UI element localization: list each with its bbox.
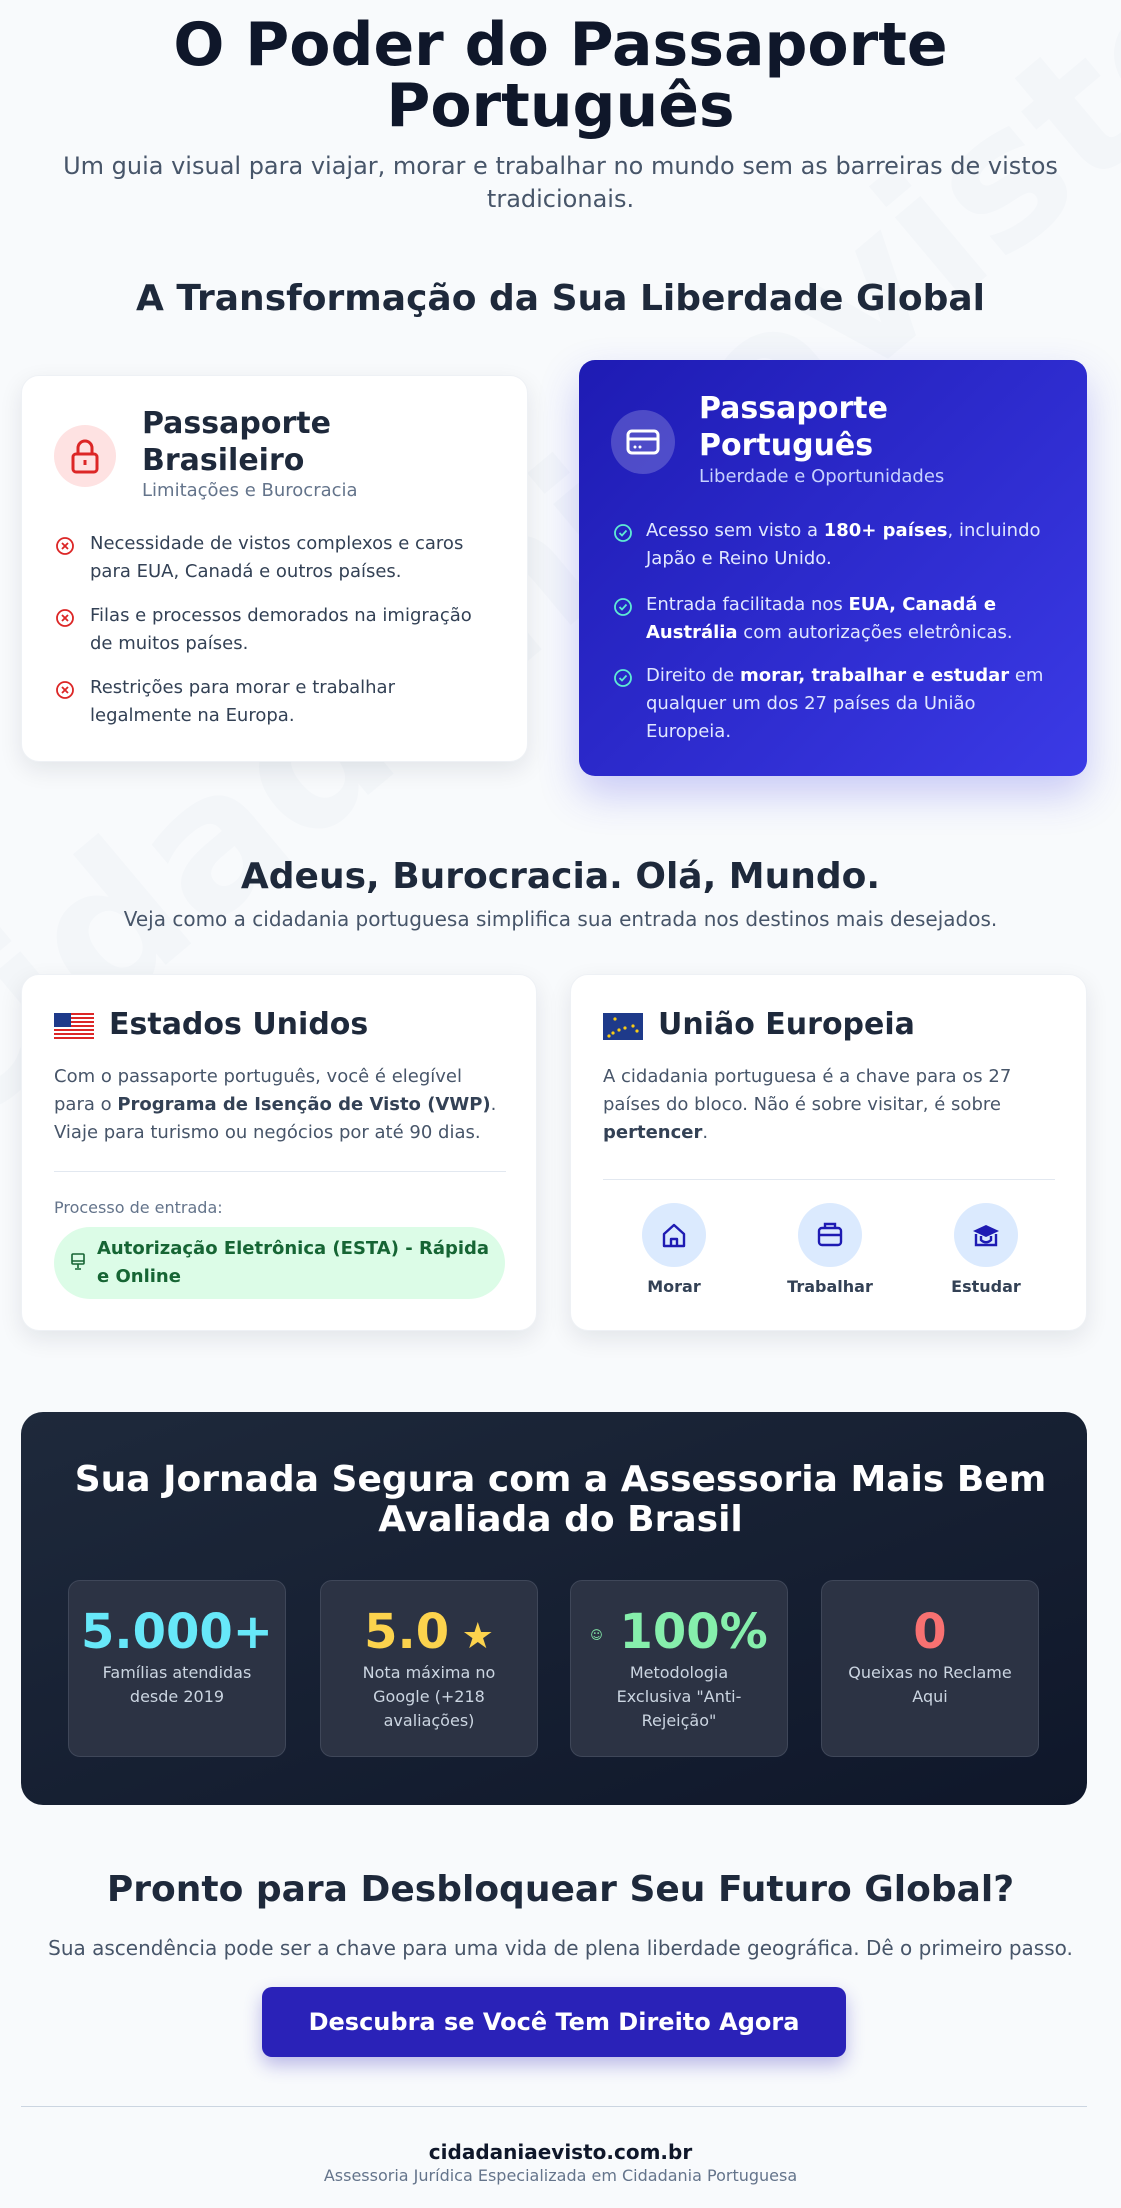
badge: esta: Autorização Eletrônica (ESTA) - Rápida e Online [97,1238,489,1287]
stat: metodologia [570,1580,788,1757]
card title: Passaporte [699,391,888,426]
list: limitações: Necessidade de vistos complexos e caros para EUA, Canadá e outros países. [90,533,463,582]
icons: morar trabalhar estudar: Estudar [951,1277,1021,1296]
card title: Brasileiro [142,443,304,478]
badge: esta [54,1227,505,1299]
text block: Viaje para turismo ou negócios por até 90 dias. [54,1122,481,1143]
stat: nota: 5.0 ★ [364,1604,494,1660]
icons: morar trabalhar estudar: Trabalhar [787,1277,873,1296]
button [262,1987,846,2057]
text block: para o Programa de Isenção de Visto (VWP). [54,1094,496,1115]
card subtitle: Liberdade e Oportunidades [699,466,944,487]
panel: união europeia [570,974,1087,1331]
stat: familias: Famílias atendidas desde 2019 [103,1663,251,1706]
footer: Assessoria Jurídica Especializada em Cidadania Portuguesa [324,2166,797,2185]
list: vantagens [614,520,1043,742]
icon: us flag [54,1013,94,1039]
text block: A cidadania portuguesa é a chave para os 27 países do bloco. Não é sobre visitar, é sobre pertencer. [603,1066,1011,1143]
icon: card [611,410,675,474]
heading: jornada segura: Sua Jornada Segura com a Assessoria Mais Bem [75,1459,1046,1500]
stat: queixas: Queixas no Reclame Aqui [848,1663,1012,1706]
subtitle: Um guia visual para viajar, morar e trabalhar no mundo sem as barreiras de vistos tradicionais. [63,152,1058,213]
stat: metodologia: ☺ 100% [590,1604,768,1660]
heading: transformação: A Transformação da Sua Liberdade Global [136,278,985,319]
card title: União Europeia [658,1007,915,1042]
card title [699,391,888,463]
title [173,10,948,141]
stat: familias [68,1580,286,1757]
stat: metodologia: Metodologia Exclusiva "Anti-Rejeição" [617,1663,741,1730]
panel: estados unidos [21,974,537,1331]
list: limitações [56,533,472,726]
icon: eu flag [603,1013,643,1040]
stat: nota [320,1580,538,1757]
stat: familias: 5.000+ [81,1604,273,1660]
footer [324,2140,797,2185]
card title: Estados Unidos [109,1007,368,1042]
list: limitações: Restrições para morar e trabalhar legalmente na Europa. [90,677,395,726]
icon: lock [54,425,116,487]
list: vantagens: Direito de morar, trabalhar e estudar em qualquer um dos 27 países da União Europeia. [646,665,1043,742]
text block: Com o passaporte português, você é elegível [54,1066,462,1087]
stat: nota: Nota máxima no Google (+218 avaliações) [363,1663,495,1730]
card title [142,406,331,478]
list: limitações: Filas e processos demorados na imigração de muitos países. [90,605,472,654]
subheading: Veja como a cidadania portuguesa simplifica sua entrada nos destinos mais desejados. [124,907,997,931]
text block [54,1066,496,1143]
heading: adeus burocracia: Adeus, Burocracia. Olá, Mundo. [241,856,880,897]
stat: queixas [821,1580,1039,1757]
footer: cidadaniaevisto.com.br [429,2140,692,2164]
button: Descubra se Você Tem Direito Agora [309,2008,799,2036]
label: processo: Processo de entrada: [54,1198,223,1217]
heading: jornada segura: Avaliada do Brasil [378,1499,743,1540]
panel: passaporte brasileiro [21,375,528,762]
panel: passaporte português [579,360,1087,776]
heading: jornada segura [75,1459,1046,1540]
icons: morar trabalhar estudar: Morar [647,1277,701,1296]
stat: queixas: 0 [913,1604,947,1660]
title: O Poder do Passaporte [173,10,948,80]
cta text: Sua ascendência pode ser a chave para uma vida de plena liberdade geográfica. Dê o primeiro passo. [48,1936,1073,1960]
card title: Passaporte [142,406,331,441]
heading: cta: Pronto para Desbloquear Seu Futuro Global? [107,1869,1014,1910]
card title: Português [699,428,873,463]
list: vantagens: Entrada facilitada nos EUA, Canadá e Austrália com autorizações eletrônicas. [646,594,1013,643]
icons: morar trabalhar estudar [642,1203,1021,1296]
panel: assessoria stats [21,1412,1087,1805]
title: Português [386,71,735,141]
list: vantagens: Acesso sem visto a 180+ países, incluindo Japão e Reino Unido. [646,520,1041,569]
card subtitle: Limitações e Burocracia [142,480,358,501]
